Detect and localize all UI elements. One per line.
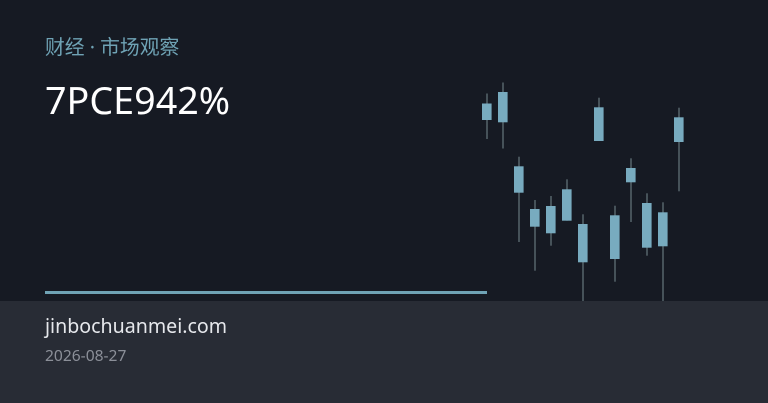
accent line — [45, 291, 487, 294]
website: jinbochuanmei.com — [45, 312, 227, 339]
category heading: 财经 · 市场观察 — [45, 33, 179, 60]
footer band — [0, 301, 768, 403]
main title: 7PCE942% — [45, 75, 230, 126]
date: 2026-08-27 — [45, 344, 126, 366]
